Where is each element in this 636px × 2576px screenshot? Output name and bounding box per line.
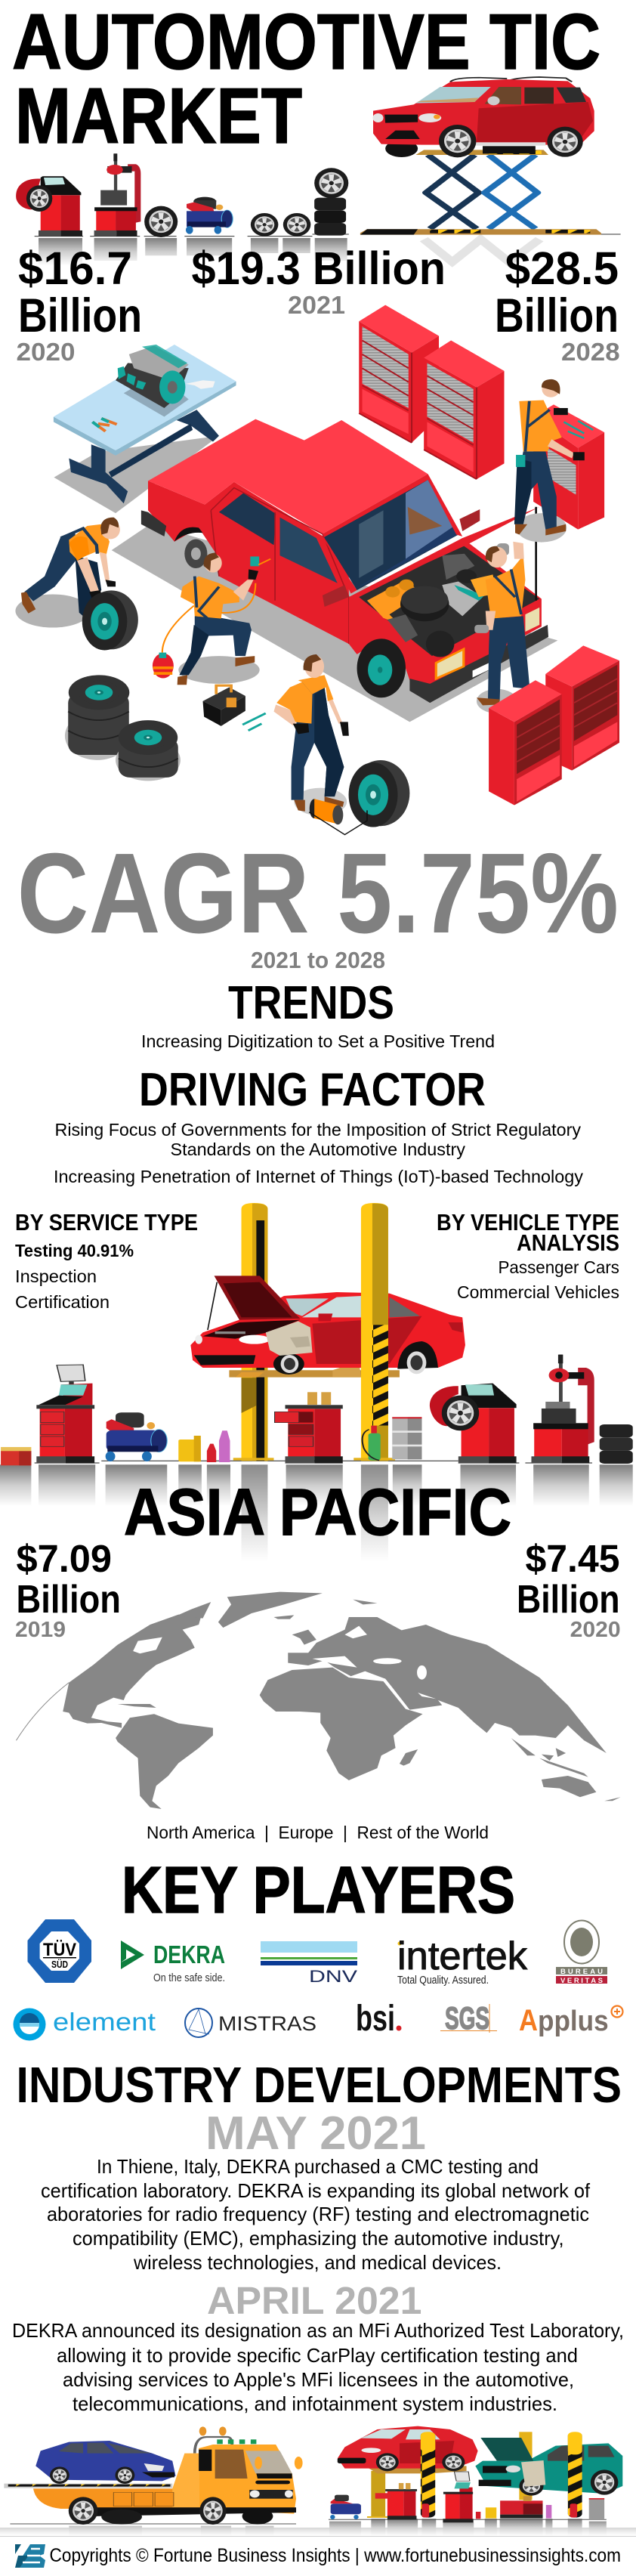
stat: 2021 value: 2021 [288,291,345,319]
tire changer [531,1355,594,1464]
driving factor text: Standards on the Automotive Industry [171,1140,465,1159]
mechanic kneeling with air tool [153,552,270,685]
development text: May 2021 [41,2155,591,2274]
stat: 2019 [15,1537,121,1642]
world map [16,1592,621,1809]
development text: April 2021: telecommunications, and infotainment system industries. [73,2392,557,2415]
logo: DEKRA: DEKRA [153,1941,225,1968]
stat: 2020 value: 2020 [17,338,76,366]
logo: Applus: pplus [538,2005,609,2037]
regions: North America | Europe | Rest of the World [147,1823,489,1842]
air compressor [186,197,233,234]
heading: key players: KEY PLAYERS [122,1854,515,1927]
trends text: Increasing Digitization to Set a Positive Trend [141,1031,495,1051]
driving factor text [54,1120,583,1186]
tow truck [4,2426,303,2525]
tire [144,206,178,237]
logo: DEKRA: On the safe side. [153,1971,225,1984]
by vehicle type: Passenger Cars [499,1257,619,1277]
red shelf units [489,645,619,806]
by service type: Testing 40.91% [15,1241,134,1260]
extinguisher [363,1426,381,1461]
red car under repair [141,419,548,703]
logo: DEKRA [121,1941,225,1984]
development text: April 2021: advising services to Apple's MFi licensees in the automotive, [63,2368,574,2391]
title line 2: MARKET [15,73,302,160]
oil and fluid bottles [178,1430,230,1462]
North America [63,1615,201,1728]
stat: 2019: $7.09 [17,1537,112,1580]
stacked tires [600,1424,633,1464]
stat: 2020: Billion [517,1578,619,1622]
stat: 2021 value [192,243,446,319]
logo: Bureau Veritas [556,1921,607,1985]
Eurasia [288,1617,607,1753]
Greenland and Arctic islands [162,1592,323,1628]
tool cabinet [275,1392,343,1464]
heading: trends: TRENDS [228,977,394,1029]
stat: 2028 value [495,243,620,366]
storage cabinet B [424,340,504,479]
logo: Bureau Veritas: BUREAU [560,1968,603,1976]
stat: 2028 value: 2028 [561,338,620,366]
red SUV [373,77,594,157]
tire changer [94,153,140,237]
diagnostic station [36,1365,94,1464]
development text: April 2021: DEKRA announced its designation as an MFi Authorized Test Laboratory, [12,2319,624,2342]
wheel balancer [430,1384,517,1464]
logo: BSI: bsi [356,1999,395,2039]
mechanic changing tire [15,518,138,651]
heading: driving factor: DRIVING FACTOR [139,1064,486,1116]
logo: Intertek: intertek [397,1934,528,1978]
logo: TUV SUD: TÜV [43,1940,76,1960]
tire stack [314,168,348,236]
toolbox and wrenches [202,685,266,731]
scissor lift [360,150,601,235]
workbench with engine [54,345,236,503]
storage cabinet A [359,305,439,443]
by service type [15,1209,198,1312]
stat: 2028 value: $28.5 [505,243,619,294]
logo: DNV [261,1941,357,1986]
by vehicle type: ANALYSIS [517,1229,619,1256]
logo: Element [14,2008,156,2040]
logo: Mistras [185,2009,316,2037]
development text: April 2021 [12,2319,624,2415]
mechanic standing by compressor [273,654,409,835]
heading: Asia Pacific: ASIA PACIFIC [124,1476,511,1549]
logo: Applus: A [519,2004,538,2037]
icon: Fortune Business Insights logo [15,2544,45,2568]
oil drum [392,1417,421,1459]
Hudson Bay [133,1637,162,1653]
stat: 2019: 2019 [15,1618,66,1642]
development text: May 2021: aboratories for radio frequency (RF) testing and electromagnetic [47,2203,589,2225]
by vehicle type: Commercial Vehicles [457,1282,619,1302]
compressor [106,1412,167,1461]
stat: 2020 value: $16.7 [18,243,132,294]
inland seas [312,1626,436,1699]
stat: 2019: Billion [17,1578,121,1622]
logo: TUV SUD [27,1919,91,1983]
illustration: tow truck and service bays [0,2426,636,2536]
by service type: BY SERVICE TYPE [15,1209,198,1235]
mechanic at cabinet [514,379,585,543]
logo: SGS: SGS [445,2000,489,2036]
development text: May 2021: wireless technologies, and medical devices. [133,2251,502,2274]
stat: 2020: 2020 [570,1618,621,1642]
logo: DNV: DNV [309,1967,357,1986]
development text: May 2021: In Thiene, Italy, DEKRA purchased a CMC testing and [97,2155,539,2178]
rims [251,213,310,237]
by service type: Inspection [15,1266,97,1286]
stacked tires [65,675,181,781]
logo: Mistras: MISTRAS [218,2012,316,2035]
development text: April 2021: allowing it to provide specific CarPlay certification testing and [57,2344,578,2367]
driving factor text: Rising Focus of Governments for the Imposition of Strict Regulatory [54,1120,582,1140]
stat: 2020 [517,1537,621,1642]
by vehicle type [437,1209,619,1302]
stat: 2028 value: Billion [495,289,619,342]
battery [1,1447,31,1465]
logo: Element: element [53,2008,156,2036]
stat: 2020 value: Billion [18,289,142,342]
left lift pillar [233,1203,273,1461]
red sedan on lift [190,1276,465,1378]
development text: May 2021: certification laboratory. DEKRA is expanding its global network of [41,2179,591,2202]
panel: market header [12,0,621,366]
illustration: isometric repair workshop [15,305,619,835]
shadows [54,436,557,722]
by service type: Certification [15,1292,110,1312]
service bays with red and teal cars [330,2426,622,2522]
islands [118,1600,621,1801]
development date: April 2021: APRIL 2021 [207,2279,421,2322]
storage cabinet C with tools [533,404,604,530]
logo: Intertek: Total Quality. Assured. [397,1974,489,1987]
mechanic at engine bay [474,542,529,713]
illustration: workshop row with car on scissor lift [16,77,621,266]
driving factor text: Increasing Penetration of Internet of Things (IoT)-based Technology [54,1167,583,1186]
Africa [260,1668,423,1780]
wheel balancer [16,176,82,237]
logo: Bureau Veritas: VERITAS [560,1977,603,1985]
South America [116,1714,213,1809]
development date: May 2021: MAY 2021 [205,2107,426,2160]
blue car [36,2441,176,2484]
floor reflections [0,1464,633,1506]
equipment [387,2491,403,2516]
teal car [475,2443,622,2494]
logo: TUV SUD: SÜD [51,1959,68,1970]
CAGR period: 2021 to 2028 [251,947,385,973]
footer band [0,2536,636,2576]
red car [338,2426,478,2469]
stat: 2021 value: $19.3 Billion [192,243,446,294]
stat: 2020: $7.45 [526,1537,619,1580]
right lift pillar [354,1203,395,1461]
stat: 2020 value [17,243,142,366]
development text: May 2021: compatibility (EMC), emphasizing the automotive industry, [73,2227,563,2250]
illustration: two-post lift workshop [0,1203,633,1562]
